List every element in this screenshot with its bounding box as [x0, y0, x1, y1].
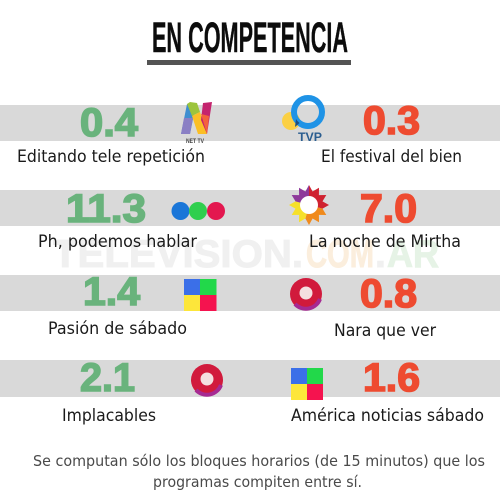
- icon: Net TV: NET TV: [186, 138, 205, 145]
- row band 2: [0, 190, 500, 226]
- icon: América squares: [184, 279, 216, 311]
- rating: América noticias sábado: 1.6: [363, 356, 420, 400]
- program: Ph, podemos hablar: Ph, podemos hablar: [38, 232, 197, 252]
- row band 3: [0, 275, 500, 311]
- icon: Trece ring: [290, 278, 322, 310]
- icon: Net TV: [181, 102, 212, 145]
- rating: Ph, podemos hablar: 11.3: [66, 187, 146, 231]
- rating: Implacables: 2.1: [80, 356, 135, 400]
- title: [147, 14, 351, 65]
- watermark: COM: [306, 233, 374, 276]
- icon: TVP: TVP: [298, 130, 322, 144]
- footnote: [33, 452, 485, 491]
- icon: Telefe sun: [289, 185, 329, 225]
- watermark: AR: [387, 233, 439, 276]
- program: Nara que ver: Nara que ver: [334, 321, 436, 341]
- rating: Pasión de sábado: 1.4: [83, 270, 141, 314]
- footnote: Se computan sólo los bloques horarios (de 15 minutos) que los: [33, 452, 485, 470]
- rating: El festival del bien: 0.3: [363, 99, 420, 143]
- program: El festival del bien: El festival del bien: [321, 147, 462, 167]
- icon: Trece ring: [191, 364, 223, 396]
- footnote: programas compiten entre sí.: [153, 473, 362, 491]
- watermark: .: [375, 233, 386, 276]
- icon: TVP: [282, 98, 322, 144]
- program: Editando tele repetición: Editando tele repetición: [17, 147, 205, 167]
- rating: Nara que ver: 0.8: [360, 272, 417, 316]
- row band 4: [0, 360, 500, 397]
- program: Pasión de sábado: Pasión de sábado: [48, 319, 187, 339]
- program: América noticias sábado: América noticias sábado: [291, 406, 484, 426]
- watermark: TELEVISION.: [53, 233, 303, 276]
- program: La noche de Mirtha: La noche de Mirtha: [309, 232, 461, 252]
- icon: América squares: [291, 368, 323, 400]
- rating: La noche de Mirtha: 7.0: [360, 187, 417, 231]
- program: Implacables: Implacables: [62, 406, 156, 426]
- row band 1: [0, 105, 500, 141]
- icon: El Nueve dots: [172, 202, 225, 220]
- rating: Editando tele repetición: 0.4: [80, 101, 139, 145]
- watermark: [53, 233, 439, 276]
